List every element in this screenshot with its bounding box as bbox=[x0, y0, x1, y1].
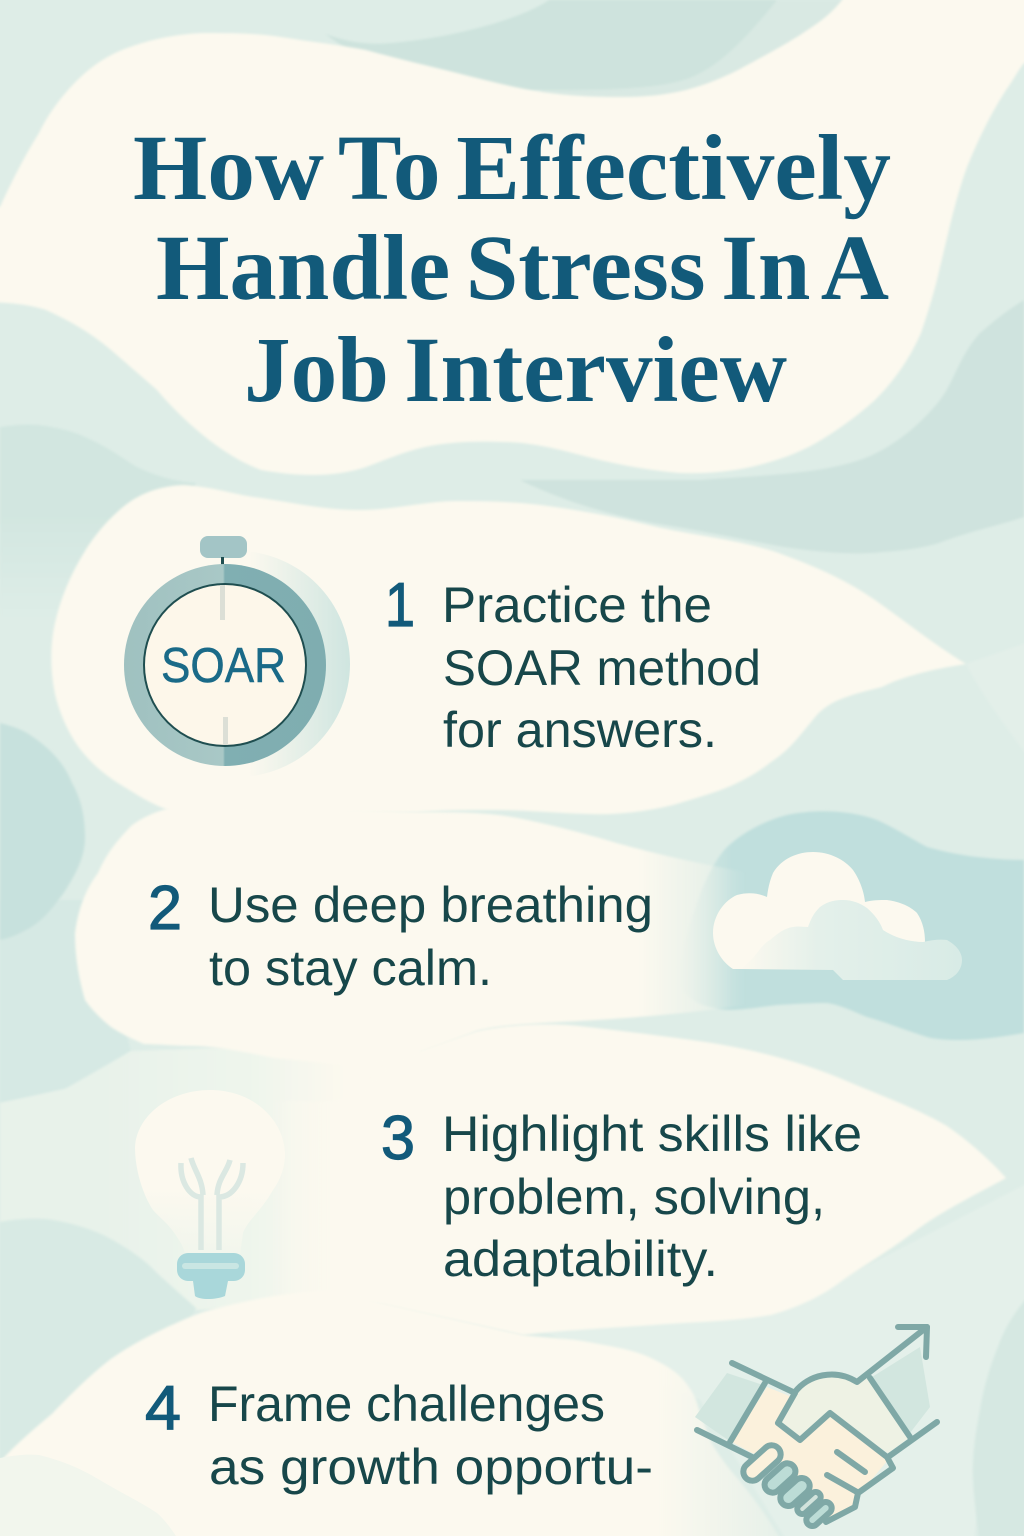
icon: cloud bbox=[713, 852, 962, 980]
title: Handle Stress In A bbox=[156, 217, 889, 320]
step 2 text: to stay calm. bbox=[209, 940, 492, 996]
decorative lobe lower left bbox=[0, 1455, 176, 1536]
step 1 text: Practice the bbox=[442, 577, 712, 633]
step 3 text: Highlight skills like bbox=[442, 1106, 862, 1162]
step 3 text: adaptability. bbox=[443, 1231, 718, 1287]
step 3 text: 3 bbox=[381, 1104, 415, 1173]
icon: handshake with growth arrow bbox=[695, 1327, 937, 1528]
panel: step 1 blob bbox=[51, 485, 966, 815]
panel: step 3 blob bbox=[270, 1024, 1006, 1335]
step 4 text: as growth opportu- bbox=[209, 1439, 653, 1495]
title: How To Effectively bbox=[133, 117, 891, 220]
icon: light bulb bbox=[135, 1090, 285, 1299]
step 1 text: SOAR method bbox=[443, 640, 761, 696]
step 1 text bbox=[385, 571, 761, 758]
step 2 text: 2 bbox=[148, 874, 182, 943]
step 4 text bbox=[145, 1374, 653, 1495]
panel: step 2 blob bbox=[75, 805, 745, 1066]
icon: SOAR stopwatch: SOAR bbox=[161, 639, 286, 693]
icon: SOAR stopwatch bbox=[124, 536, 350, 777]
step 3 text bbox=[381, 1104, 862, 1287]
step 3 text: problem, solving, bbox=[443, 1169, 825, 1225]
title bbox=[133, 117, 891, 422]
step 1 text: 1 bbox=[385, 571, 415, 640]
step 4 text: Frame challenges bbox=[208, 1376, 605, 1432]
step 1 text: for answers. bbox=[443, 702, 717, 758]
step 2 text bbox=[148, 874, 653, 996]
step 4 text: 4 bbox=[145, 1374, 181, 1443]
panel: step 4 blob bbox=[0, 1290, 784, 1536]
panel: title blob bbox=[0, 0, 1024, 475]
step 2 text: Use deep breathing bbox=[208, 877, 653, 933]
title: Job Interview bbox=[244, 319, 787, 422]
